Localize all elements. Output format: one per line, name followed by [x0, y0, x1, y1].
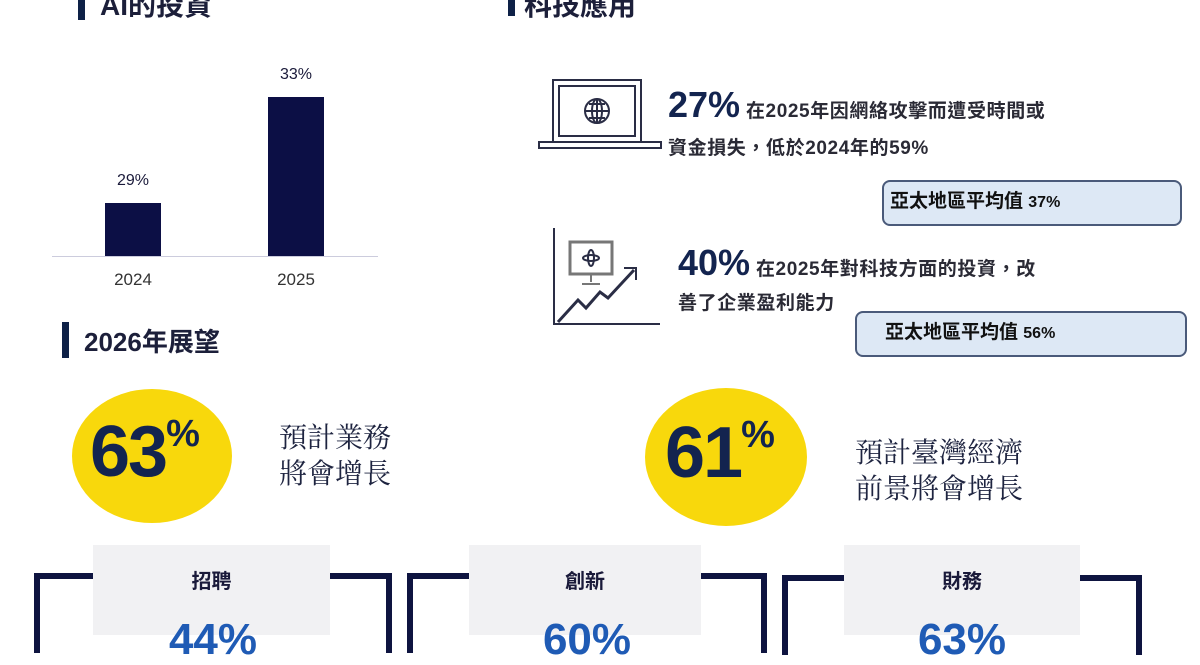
callout: APAC avg 56%: 亞太地區平均值 56% [885, 322, 1055, 343]
text: 44% [169, 615, 257, 664]
bar chart: 33% [280, 66, 312, 83]
panel: hiring: 招聘 [192, 571, 232, 593]
circle: 63% business growth [72, 389, 232, 523]
panel: hiring [34, 545, 392, 664]
icon: monitor growth chart [553, 228, 660, 325]
text: 63% [918, 615, 1006, 664]
text: economy outlook: 預計臺灣經濟 [855, 438, 1023, 469]
text: tech investment stat: 善了企業盈利能力 [678, 293, 835, 314]
text: tech investment stat: 40% 在2025年對科技方面的投資，改 [678, 242, 1036, 283]
bar chart: 29% [117, 172, 149, 189]
panel: innovation [407, 545, 767, 664]
panel: finance: 財務 [942, 571, 982, 593]
circle: 63% business growth: 63% [90, 412, 198, 492]
circle: 61% economy [645, 388, 807, 526]
text: cyber loss stat: 27% 在2025年因網絡攻擊而遭受時間或 [668, 84, 1045, 125]
panel: innovation: 創新 [565, 571, 605, 593]
text: economy outlook: 前景將會增長 [855, 474, 1023, 505]
text: 60% [543, 615, 631, 664]
circle: 61% economy: 61% [665, 413, 773, 493]
icon: laptop globe [538, 79, 662, 149]
text: business growth: 將會增長 [279, 459, 391, 490]
text: tech investment stat [678, 242, 1036, 314]
heading: 2026 outlook: 2026年展望 [84, 327, 220, 357]
text: business growth [279, 423, 391, 490]
callout: APAC avg 37%: 亞太地區平均值 37% [890, 191, 1060, 212]
text: business growth: 預計業務 [279, 423, 391, 454]
bar chart: 2025 [277, 270, 315, 289]
bar chart [52, 66, 378, 289]
text: economy outlook [855, 438, 1023, 505]
text: cyber loss stat [668, 84, 1045, 159]
panel: finance [782, 545, 1142, 664]
bar 2024 [105, 203, 161, 256]
callout: APAC avg 37% [882, 180, 1182, 226]
bar chart: 2024 [114, 270, 152, 289]
callout: APAC avg 56% [855, 311, 1187, 357]
text: cyber loss stat: 資金損失，低於2024年的59% [668, 138, 929, 159]
bar 2025 [268, 97, 324, 256]
